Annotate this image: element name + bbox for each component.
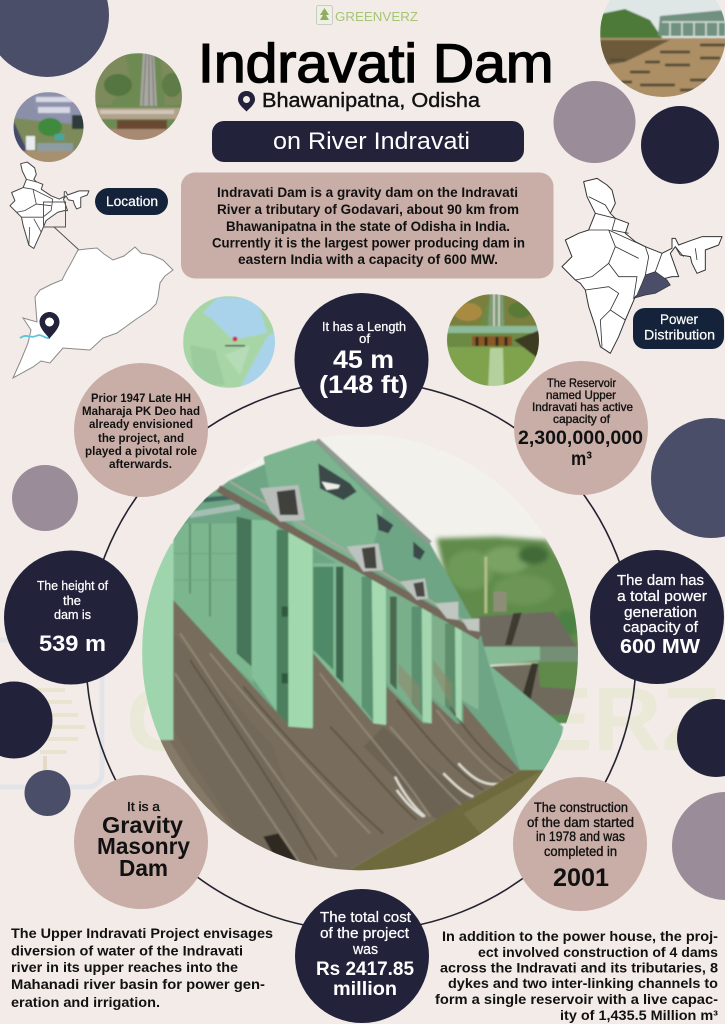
ring connecting fact circles <box>86 381 636 931</box>
label: Power Distribution <box>633 308 724 349</box>
fact circle: height: 539 m <box>39 631 106 656</box>
fact circle: construction period: 2001 <box>553 864 609 892</box>
decorative circle: top left <box>0 0 109 77</box>
decorative circle: grey right <box>672 792 725 900</box>
description panel: Currently it is the largest power producing dam in <box>212 236 525 250</box>
river pill: on River Indravati <box>273 128 470 155</box>
fact circle: total cost: million <box>333 979 397 1000</box>
label: Power Distribution: Distribution <box>644 328 715 342</box>
location subtitle with pin: Bhawanipatna, Odisha <box>262 89 481 112</box>
fact circle: power capacity <box>590 550 724 684</box>
fact circle: total cost: Rs 2417.85 <box>316 959 414 980</box>
fact circle: reservoir capacity: m³ <box>571 449 592 470</box>
text block: project works: In addition to the power house, the proj- <box>442 928 718 944</box>
decorative circle: navy left <box>0 682 52 758</box>
fact circle: history <box>74 363 208 497</box>
photo: penstock hill <box>95 53 183 141</box>
fact circle: history: the project, and <box>98 431 184 445</box>
fact circle: construction period: The construction <box>534 800 628 815</box>
fact circle: construction period: of the dam started <box>527 815 634 830</box>
fact circle: reservoir capacity: capacity of <box>553 412 611 426</box>
fact circle: history: already envisioned <box>89 417 193 431</box>
fact circle: length: It has a Length <box>322 320 406 334</box>
text block: project purpose: river in its upper reaches into the <box>11 959 238 975</box>
decorative circle: navy right <box>677 699 725 777</box>
text block: project works: ity of 1,435.5 Million m³ <box>560 1007 718 1023</box>
fact circle: total cost: was <box>352 941 378 958</box>
label: Location <box>95 188 168 215</box>
fact circle: history: Prior 1947 Late HH <box>91 391 191 405</box>
fact circle: reservoir capacity: Indravati has active <box>532 400 633 414</box>
fact circle: dam type <box>74 775 208 909</box>
fact circle: dam type: Dam <box>119 855 168 881</box>
fact circle: length: 45 m <box>333 346 394 374</box>
decorative circle: grey left <box>12 465 78 531</box>
photo: penstocks over green water <box>446 294 540 388</box>
map: India small with Odisha inset marker <box>10 162 89 250</box>
decorative circle: small slate left <box>24 770 70 816</box>
main photo: Indravati dam spillway <box>142 438 578 870</box>
photo: dam aerial left <box>13 92 85 165</box>
text block: project purpose: eration and irrigation. <box>11 994 160 1010</box>
fact circle: height <box>4 550 138 684</box>
decorative circle: slate right <box>651 418 725 538</box>
map: Odisha outline with location pin and river <box>13 247 173 378</box>
fact circle: height: the <box>63 593 81 608</box>
text block: project purpose: diversion of water of the Indravati <box>11 942 243 958</box>
text block: project purpose <box>11 925 273 1010</box>
photo: dam and rocky river bed <box>600 0 725 100</box>
text block: project works: dykes and two inter-linking channels to <box>448 975 718 991</box>
fact circle: dam type: It is a <box>127 799 161 814</box>
fact circle: dam type: Masonry <box>97 833 190 859</box>
fact circle: total cost: The total cost <box>320 909 412 926</box>
description panel: Bhawanipatna in the state of Odisha in India. <box>226 219 510 234</box>
fact circle: history: played a pivotal role <box>85 444 197 458</box>
fact circle: height: dam is <box>54 607 91 622</box>
fact circle: reservoir capacity: The Reservoir <box>547 376 616 390</box>
fact circle: history: afterwards. <box>109 457 172 471</box>
fact circle: history: Maharaja PK Deo had <box>82 404 200 418</box>
fact circle: length: (148 ft) <box>319 371 408 399</box>
decorative circle: grey top right <box>554 81 636 163</box>
fact circle: dam type: Gravity <box>102 812 183 838</box>
fact circle: power capacity: 600 MW <box>620 636 700 658</box>
fact circle: reservoir capacity: named Upper <box>546 388 616 402</box>
logo: Greenverz <box>316 6 418 24</box>
fact circle: construction period: in 1978 and was <box>536 829 625 844</box>
watermark: phone icon <box>0 640 102 787</box>
photo: map view of reservoir <box>183 296 276 388</box>
text block: project works: across the Indravati and its tributaries, 8 <box>440 960 718 976</box>
fact circle: power capacity: a total power <box>617 588 707 605</box>
fact circle: total cost <box>295 889 429 1023</box>
fact circle: height: The height of <box>37 578 108 593</box>
map: India large with Odisha highlighted <box>562 178 722 353</box>
text block: project purpose: The Upper Indravati Project envisages <box>11 925 273 941</box>
description panel <box>181 172 554 278</box>
fact circle: reservoir capacity: 2,300,000,000 <box>518 428 643 449</box>
title: Indravati Dam <box>198 33 554 94</box>
fact circle: power capacity: generation <box>624 604 697 621</box>
watermark: brand text: GREENVERZ <box>126 670 720 770</box>
text block: project purpose: Mahanadi river basin for power gen- <box>11 976 265 992</box>
description panel: River a tributary of Godavari, about 90 km from <box>217 202 519 217</box>
fact circle: power capacity: capacity of <box>623 619 699 636</box>
fact circle: construction period <box>513 777 647 911</box>
label: Location: Location <box>106 194 158 209</box>
fact circle: length: of <box>359 332 371 346</box>
fact circle: reservoir capacity <box>514 361 648 495</box>
description panel: Indravati Dam is a gravity dam on the Indravati <box>217 185 518 200</box>
text block: project works: form a single reservoir with a live capac- <box>435 991 718 1007</box>
fact circle: power capacity: The dam has <box>617 572 704 589</box>
decorative circle: navy top right <box>641 106 719 184</box>
fact circle: construction period: completed in <box>544 844 617 859</box>
logo: Greenverz: GREENVERZ <box>335 10 418 24</box>
text block: project works: ect involved construction of 4 dams <box>478 944 718 960</box>
fact circle: total cost: of the project <box>320 925 410 942</box>
fact circle: length <box>294 293 428 427</box>
river pill <box>212 121 524 162</box>
label: Power Distribution: Power <box>660 312 699 327</box>
description panel: eastern India with a capacity of 600 MW. <box>238 252 498 267</box>
text block: project works <box>435 928 718 1023</box>
